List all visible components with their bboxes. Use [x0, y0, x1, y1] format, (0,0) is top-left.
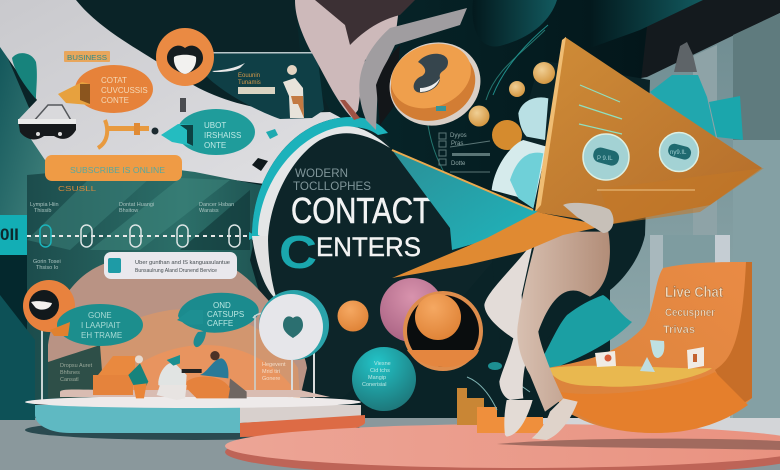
small text left arch: Bhfsnes	[60, 370, 80, 376]
plane lines	[579, 85, 622, 134]
sign: orange circle and bubble	[23, 280, 143, 400]
top fold shapes	[295, 0, 467, 130]
small text: Eouunin	[238, 73, 260, 79]
small text left arch: Cansatl	[60, 377, 79, 383]
checklist	[439, 133, 490, 172]
title second line	[279, 226, 421, 278]
card: live chat: Trivas	[663, 324, 695, 336]
sign: round eye: Hegevent	[262, 362, 286, 368]
timeline labels: Gorin Tosei	[33, 259, 61, 265]
bubble: orange contact: COTAT	[101, 76, 127, 85]
title: CONTACT	[291, 190, 431, 231]
pink platform	[225, 424, 780, 470]
small orange label: CSUSLL	[58, 186, 96, 193]
small text left arch: Dropsu Auret	[60, 363, 93, 369]
room wall right	[600, 0, 780, 430]
sign: round eye	[253, 290, 329, 400]
sphere teal with text	[352, 347, 416, 411]
tag orange	[64, 51, 110, 62]
teal swooshes top	[472, 0, 703, 48]
icon: glyph	[414, 54, 448, 93]
orange balls	[468, 62, 555, 150]
grey curved panel	[0, 0, 345, 184]
bubble: teal centre: CATSUPS	[207, 310, 244, 319]
teal mound	[540, 295, 632, 372]
bubble: orange contact: CUVCUSSIS	[101, 86, 148, 95]
bubble: teal centre: OND	[213, 301, 231, 310]
bubble: teal robot: ONTE	[204, 141, 226, 150]
icon: orange wrench	[98, 120, 158, 148]
timeline	[27, 225, 275, 247]
plane badge right: ny9.IL	[670, 150, 687, 156]
sign: round eye: Gonere	[262, 376, 280, 382]
checklist: Dotte	[451, 161, 466, 167]
info pill	[104, 252, 237, 279]
picture panel top	[205, 52, 324, 119]
bubble: teal robot: UBOT	[204, 121, 226, 130]
sphere orange	[338, 300, 368, 332]
figure in picture	[283, 65, 304, 118]
bubble: orange contact	[58, 65, 153, 113]
bubble: teal centre: CAFFE	[207, 319, 233, 328]
title second line: ENTERS	[316, 232, 421, 262]
orange bar: SUBSCRIBE IS ONLINE	[70, 166, 165, 175]
sign: orange circle and bubble: I LAAPIAIT	[81, 321, 121, 330]
plane badge left	[583, 134, 629, 180]
orange steps	[457, 388, 543, 433]
stage	[25, 390, 365, 440]
timeline labels: Dancer Hsban	[199, 202, 234, 208]
person torso	[492, 97, 548, 208]
lamp	[650, 42, 743, 140]
title second line: C	[279, 226, 317, 278]
bubble: orange contact: CONTE	[101, 96, 129, 105]
ring with ball	[403, 291, 483, 371]
legs	[484, 232, 610, 440]
card: live chat: Cecuspner	[665, 307, 716, 319]
bubble: teal robot	[161, 109, 255, 155]
timeline labels: Bhsitow	[119, 208, 138, 214]
people group	[128, 351, 247, 400]
picture panel top: Tunamis	[238, 80, 261, 86]
sphere teal with text: Mangip	[368, 375, 386, 381]
orange lower wing	[392, 212, 605, 278]
shoes	[504, 400, 533, 437]
small teal blob	[488, 362, 502, 370]
info pill: Uber gunthan and IS kanguasulantue	[135, 260, 230, 266]
sign: round eye: Mrid tiri	[262, 369, 280, 375]
timeline labels	[30, 202, 234, 271]
sphere teal with text: Conerisial	[362, 382, 386, 388]
dark panel lower left	[48, 345, 104, 398]
icon: orange circle mask	[156, 28, 214, 86]
timeline labels: Thissib	[34, 208, 51, 214]
tag orange: BUSINESS	[67, 55, 107, 62]
sign: orange circle and bubble: GONE	[88, 311, 112, 320]
cyan tab: 0II	[0, 225, 19, 244]
cyan tab	[0, 215, 27, 255]
peach arch	[48, 258, 307, 398]
card: live chat	[548, 262, 752, 433]
orange boxes	[93, 356, 135, 395]
timeline labels: Waraiss	[199, 208, 219, 214]
orange disc	[378, 30, 492, 138]
icon: VR headset	[18, 105, 76, 139]
bubble: teal robot: IRSHAISS	[204, 131, 241, 140]
plane badge left: P 9.IL	[597, 156, 613, 162]
hand	[563, 203, 614, 233]
teal wing	[392, 150, 538, 250]
white swoosh	[212, 63, 245, 72]
orange bar	[45, 155, 182, 181]
checklist: Pras	[451, 141, 463, 147]
title: TOCLLOPHES	[293, 179, 371, 193]
sphere pink	[380, 278, 444, 342]
plane badge right	[660, 132, 698, 172]
floor	[0, 418, 780, 470]
small text left arch	[60, 363, 93, 383]
title: WODERN	[295, 166, 348, 180]
bubble: teal centre	[177, 293, 259, 347]
timeline labels: Lympia Hiin	[30, 202, 59, 208]
timeline labels: Thsiso Io	[36, 265, 58, 271]
checklist: Dyyos	[450, 133, 467, 139]
card: live chat: Live Chat	[665, 284, 723, 301]
shadow on platform	[497, 439, 780, 450]
central circle	[252, 117, 520, 400]
shape teal leaf	[12, 53, 37, 99]
top dark area	[60, 0, 650, 230]
left dark teal wall	[0, 255, 35, 420]
small icons on grey	[180, 98, 278, 171]
sphere teal with text: Viesne	[374, 361, 391, 367]
paper plane	[535, 37, 764, 224]
dark behind figure	[490, 60, 650, 395]
squiggle line	[467, 377, 530, 410]
circle ring	[252, 117, 390, 300]
sign: orange circle and bubble: EH TRAME	[81, 331, 122, 340]
info pill: Bunsaulrung Aland Drunend Bervice	[135, 268, 217, 274]
timeline labels: Dontat Huangi	[119, 202, 154, 208]
card icons	[595, 340, 704, 372]
left teal area	[0, 40, 60, 260]
lower left panel	[27, 165, 340, 400]
sphere teal with text: Cid tchs	[370, 368, 390, 374]
circuit lines	[428, 25, 548, 180]
title	[279, 166, 431, 278]
